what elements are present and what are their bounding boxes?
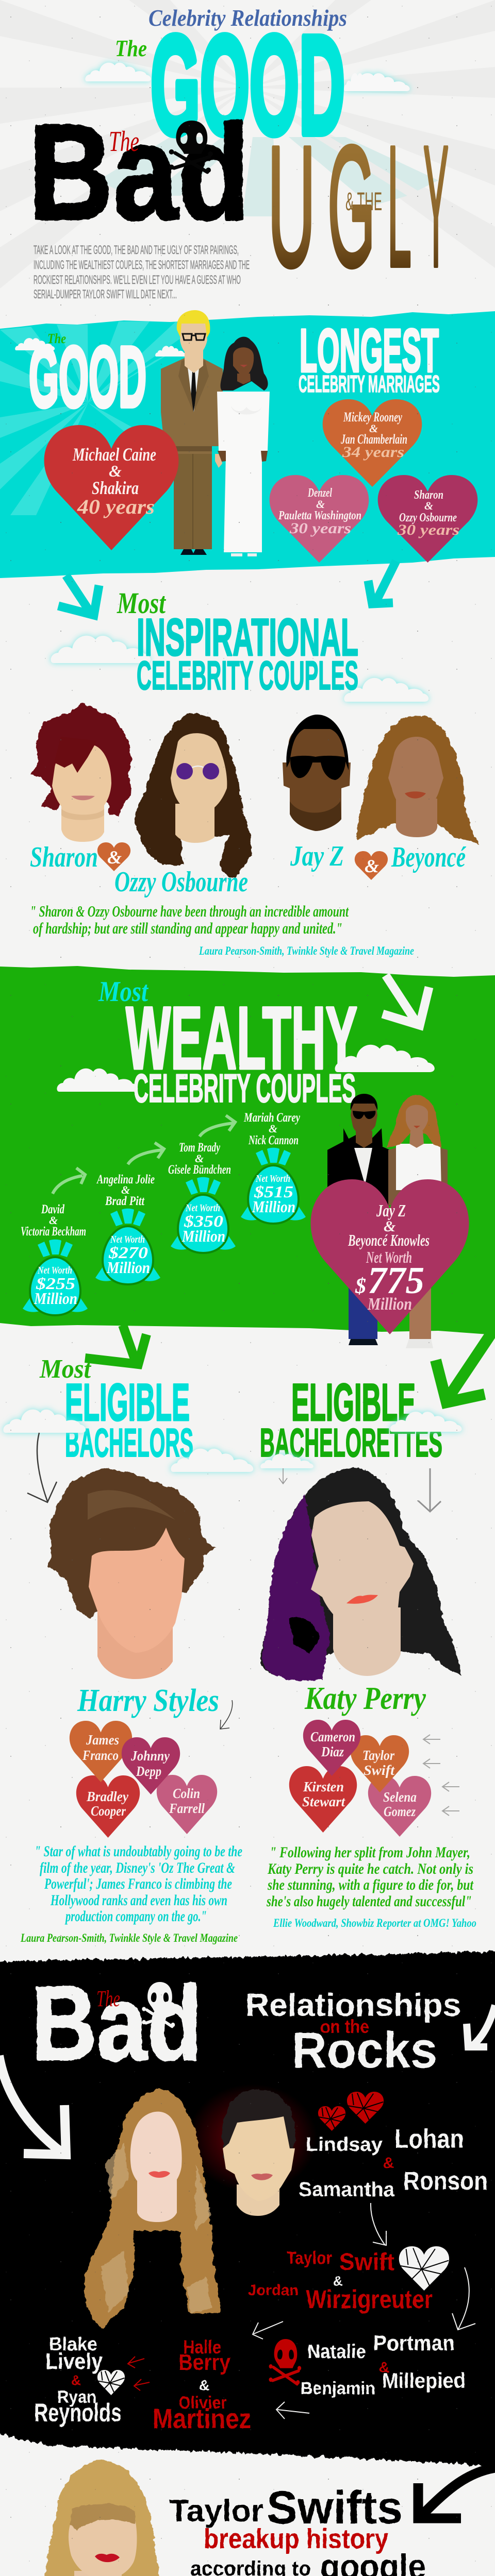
hearts: Bachelorettes: Taylor <box>362 1748 394 1763</box>
hearts: Bachelors <box>70 1721 217 1838</box>
heart: Jay Z and Beyonce net worth: Jay Z <box>376 1201 406 1221</box>
face: Sharon Osbourne <box>31 703 132 842</box>
names: Portman and Millepied <box>301 2331 466 2398</box>
heart: Michael Caine and Shakira: 40 years <box>77 495 155 518</box>
names: Swift and Wirzigreuter: & <box>333 2273 343 2289</box>
thin arrows <box>253 2267 475 2419</box>
money bag: Jolie Pitt: Brad Pitt <box>105 1194 145 1208</box>
face: Beyonce <box>357 716 480 845</box>
panel: most wealthy couples <box>0 966 495 1348</box>
names: Lively and Reynolds: Blake <box>49 2333 97 2354</box>
hearts: Bachelorettes: Swift <box>364 1762 395 1778</box>
heart ampersand: & <box>107 847 122 868</box>
black brushed band <box>0 1952 495 2469</box>
quote: " Sharon & Ozzy Osbourne have been through an incredible amount <box>30 902 349 920</box>
names: Lively and Reynolds <box>34 2333 122 2427</box>
hearts: Bachelorettes: Gomez <box>384 1804 416 1819</box>
money bag: Jolie Pitt: Angelina Jolie <box>96 1173 155 1187</box>
face: Taylor Swift <box>41 2461 188 2576</box>
money bag: Brady Bundchen: Net Worth <box>185 1202 220 1214</box>
figure: groom <box>161 310 223 555</box>
arrows between bags <box>53 1115 235 1194</box>
cloud left <box>51 636 151 663</box>
money bag: Brady Bundchen: Gisele Bündchen <box>168 1163 231 1177</box>
heart: Mickey Rooney and Jan Chamberlain: Jan Chamberlain <box>340 432 407 447</box>
name: Katy Perry: Katy Perry <box>304 1681 426 1716</box>
heart: Sharon and Ozzy Osbourne: & <box>424 499 433 512</box>
heart: Michael Caine and Shakira <box>44 425 178 550</box>
heart: Denzel and Pauletta Washington: Pauletta Washington <box>278 509 361 522</box>
cloud centre <box>155 346 186 357</box>
money bag: Beckham: Victoria Beckham <box>21 1225 86 1239</box>
quote: Katy Perry <box>266 1844 474 1910</box>
heart: Jay Z and Beyonce net worth <box>310 1179 469 1334</box>
hearts: Bachelorettes <box>289 1720 431 1837</box>
broken heart white <box>399 2246 449 2291</box>
heading: eligible bachelorettes <box>260 1373 442 1465</box>
heading: Relationships on the Rocks: Rocks <box>292 2022 437 2078</box>
names: Lively and Reynolds: Lively <box>45 2349 103 2374</box>
background sun rays <box>0 0 495 289</box>
face: Samantha Ronson <box>222 2090 295 2216</box>
heading: eligible bachelors <box>65 1373 193 1465</box>
heart: Mickey Rooney and Jan Chamberlain <box>323 399 422 487</box>
quote: James Franco: Hollywood ranks and even has his own <box>50 1892 227 1909</box>
arrow right <box>467 2005 495 2047</box>
thin arrows <box>27 1433 441 1512</box>
heading: Taylor Swifts breakup history according to google: Taylor <box>169 2494 263 2528</box>
names: Lively and Reynolds: Ryan <box>57 2387 96 2407</box>
money bag: Carey Cannon: $515 <box>254 1182 293 1201</box>
BAD heading: Bad <box>31 1964 202 2082</box>
money bag: Carey Cannon <box>241 1111 306 1224</box>
cloud left <box>15 338 55 350</box>
heart: Michael Caine and Shakira: Shakira <box>92 478 139 498</box>
face: Harry Styles <box>49 1468 217 1679</box>
heart ampersand <box>97 842 130 871</box>
intro paragraph <box>34 243 250 301</box>
section: main title: ROCKIEST RELATIONSHIPS. WE'LL EVEN LET YOU HAVE A GUESS AT WHO <box>34 273 241 287</box>
money bag: Brady Bundchen: Million <box>182 1227 225 1245</box>
heart: Denzel and Pauletta Washington <box>270 475 369 563</box>
hearts: Bachelorettes: Kirsten <box>303 1779 344 1794</box>
"The" green: The <box>115 35 147 61</box>
heart: Mickey Rooney and Jan Chamberlain: & <box>369 422 378 435</box>
names: Swift and Wirzigreuter: Taylor <box>287 2248 332 2268</box>
names: Berry and Martinez <box>153 2336 251 2434</box>
face: Ozzy Osbourne <box>135 713 252 878</box>
hearts: Bachelorettes: Stewart <box>302 1794 345 1809</box>
heart: Michael Caine and Shakira: & <box>109 462 122 480</box>
small white broken heart <box>97 2370 125 2395</box>
money bag: Carey Cannon: Million <box>252 1197 295 1216</box>
label: Sharon: Sharon <box>30 841 98 873</box>
hearts: Bachelors: Franco <box>82 1748 119 1763</box>
names: Lohan and Ronson <box>299 2124 488 2201</box>
heading: eligible bachelors: ELIGIBLE <box>65 1373 190 1432</box>
panel: the bad, relationships on the rocks <box>0 1952 495 2469</box>
money bag: Beckham: $255 <box>36 1274 75 1293</box>
money bag: Jolie Pitt: & <box>121 1183 130 1196</box>
red glow <box>188 2084 317 2192</box>
names: Lively and Reynolds: & <box>71 2372 81 2388</box>
money bag: Jolie Pitt: Net Worth <box>110 1234 145 1245</box>
"The" red: The <box>109 126 139 158</box>
hearts: Bachelors: Cooper <box>91 1803 126 1819</box>
heart ampersand: & <box>365 856 379 876</box>
heading: eligible bachelors: BACHELORS <box>65 1420 193 1465</box>
quote <box>30 902 349 937</box>
heading: Taylor Swifts breakup history according to google: breakup history <box>204 2523 388 2554</box>
names: Lohan and Ronson: Samantha <box>299 2178 395 2201</box>
UGLY wordmark: G <box>327 110 375 302</box>
money bag: Beckham: David <box>41 1202 64 1216</box>
broken heart <box>347 2092 384 2124</box>
heart: Sharon and Ozzy Osbourne <box>378 475 477 563</box>
heading: Relationships on the Rocks <box>245 1988 461 2078</box>
hearts: Bachelorettes: Diaz <box>321 1744 344 1759</box>
label: Jay Z: Jay Z <box>290 840 344 872</box>
face: Blake Lively <box>84 2089 221 2330</box>
thin arrow <box>371 2203 386 2245</box>
"The": The <box>47 331 66 346</box>
heading: Relationships on the Rocks: Relationships <box>245 1988 461 2023</box>
teal torn band <box>0 311 495 578</box>
cloud right <box>335 1045 435 1072</box>
thin arrow <box>220 1700 233 1729</box>
BAD wordmark: Bad <box>28 96 250 248</box>
names: Portman and Millepied: & <box>379 2359 389 2375</box>
names: Portman and Millepied: Benjamin <box>301 2379 375 2398</box>
quote: James Franco: " Star of what is undoubtably going to be the <box>35 1843 242 1860</box>
panel: the good, longest marriages <box>0 310 495 578</box>
money bag: Beckham: Million <box>34 1289 77 1308</box>
name: Harry Styles: Harry Styles <box>77 1683 219 1718</box>
heading: Celebrity Relationships: Celebrity Relationships <box>148 5 347 31</box>
face: Jay Z <box>283 715 351 831</box>
names: Berry and Martinez: & <box>199 2377 209 2393</box>
section: main title <box>28 5 449 302</box>
names: Swift and Wirzigreuter: Wirzigreuter <box>306 2285 433 2314</box>
sun rays behind GOOD <box>0 320 206 515</box>
panel: most eligible <box>3 1325 492 1944</box>
heart: Mickey Rooney and Jan Chamberlain: 34 years <box>342 444 404 461</box>
icon: skull <box>142 1982 176 2027</box>
UGLY wordmark: L <box>387 110 411 302</box>
"The": The <box>96 1986 120 2011</box>
"Most": Most <box>98 976 148 1008</box>
attribution: Laura Pearson-Smith, Twinkle Style & Travel Magazine <box>199 944 414 957</box>
quote: James Franco: production company on the go." <box>64 1908 207 1925</box>
heart: Sharon and Ozzy Osbourne: 30 years <box>397 521 459 538</box>
money bag: Brady Bundchen: $350 <box>184 1212 223 1230</box>
money bag: Beckham: Net Worth <box>37 1265 72 1276</box>
section: main title: TAKE A LOOK AT THE GOOD, THE BAD AND THE UGLY OF STAR PAIRINGS, <box>34 243 239 257</box>
names: Berry and Martinez: Martinez <box>153 2403 251 2434</box>
heading: Taylor Swifts breakup history according to google: Swifts <box>267 2482 403 2534</box>
heart: Jay Z and Beyonce net worth: & <box>384 1218 395 1235</box>
heart: Mickey Rooney and Jan Chamberlain: Mickey Rooney <box>343 410 402 425</box>
panel: most inspirational couples <box>30 561 480 957</box>
money bag: Carey Cannon: Nick Cannon <box>248 1133 299 1147</box>
cloud right <box>344 678 428 702</box>
cloud left <box>85 62 151 81</box>
heart: Jay Z and Beyonce net worth: Beyoncé Knowles <box>348 1231 430 1249</box>
intro paragraph: SERIAL-DUMPER TAYLOR SWIFT WILL DATE NEXT... <box>34 287 177 301</box>
face: Katy Perry <box>261 1468 461 1681</box>
hearts: Bachelors: James <box>86 1732 119 1748</box>
attribution: Laura Pearson-Smith, Twinkle Style & Travel Magazine <box>20 1931 238 1944</box>
money bag: Carey Cannon: & <box>269 1122 277 1135</box>
green torn band <box>0 966 495 1335</box>
names: Lohan and Ronson: & <box>383 2155 394 2172</box>
heart: Jay Z and Beyonce net worth: 775 <box>368 1260 424 1302</box>
cloud left <box>57 1069 138 1092</box>
heart: Sharon and Ozzy Osbourne: Ozzy Osbourne <box>399 511 457 524</box>
names: Lohan and Ronson: Lohan <box>394 2124 464 2154</box>
names: Berry and Martinez: Berry <box>178 2350 230 2375</box>
names: Lively and Reynolds: Reynolds <box>34 2398 122 2427</box>
quote: James Franco: film of the year, Disney's 'Oz The Great & <box>40 1859 235 1876</box>
small red arrow <box>128 2357 144 2368</box>
figure: bride <box>217 337 270 556</box>
hearts: Bachelors: Colin <box>173 1786 200 1801</box>
heart: Denzel and Pauletta Washington: Denzel <box>307 486 332 500</box>
money bag: Jolie Pitt: Million <box>106 1258 150 1277</box>
arrow white <box>383 975 429 1025</box>
cloud right overlap <box>344 73 374 91</box>
hearts: Bachelors: Johnny <box>130 1748 170 1764</box>
heart: Sharon and Ozzy Osbourne: Sharon <box>414 488 443 502</box>
quote: of hardship; but are still standing and appear happy and united." <box>33 919 342 937</box>
clouds <box>3 1410 461 1472</box>
money bag: Jolie Pitt: $270 <box>108 1243 148 1262</box>
names: Berry and Martinez: Olivier <box>178 2393 227 2413</box>
hearts: Bachelorettes: Selena <box>383 1789 417 1805</box>
money bag: Carey Cannon: Net Worth <box>255 1173 290 1184</box>
icon: skull and crossbones <box>169 121 213 173</box>
hearts: Bachelors: Depp <box>136 1764 161 1779</box>
panel: Taylor Swift breakup history <box>41 2461 495 2576</box>
small red arrow <box>134 2379 150 2391</box>
section: main title: & THE <box>345 187 382 216</box>
broken hearts <box>318 2106 345 2131</box>
figure: Jay Z <box>327 1094 390 1345</box>
heart: Denzel and Pauletta Washington: & <box>316 498 325 511</box>
label: Beyonce: Beyoncé <box>391 841 467 873</box>
rays under GOOD <box>98 137 438 216</box>
heart: Denzel and Pauletta Washington: 30 years <box>289 520 351 537</box>
money bag: Brady Bundchen: Tom Brady <box>179 1141 221 1155</box>
arrow green left <box>85 1325 146 1364</box>
heart: Jay Z and Beyonce net worth: Net Worth <box>366 1248 412 1266</box>
arrow green right <box>436 1332 492 1402</box>
names: Swift and Wirzigreuter: Jordan <box>248 2282 299 2299</box>
names: Portman and Millepied: Portman <box>373 2331 455 2355</box>
hearts: Bachelors: Farrell <box>169 1801 205 1816</box>
grey arrows <box>423 1735 459 1816</box>
hearts: Bachelorettes: Cameron <box>310 1729 355 1744</box>
icon: red skull <box>269 2339 301 2384</box>
money bag: Beckham <box>21 1202 88 1315</box>
heart: Jay Z and Beyonce net worth: $ <box>355 1275 366 1298</box>
arrow left <box>58 575 99 615</box>
arrow black <box>418 2468 495 2518</box>
money bag: Jolie Pitt <box>95 1173 160 1284</box>
"Most": Most <box>117 586 166 620</box>
names: Portman and Millepied: Millepied <box>382 2368 466 2393</box>
names: Portman and Millepied: Natalie <box>307 2341 366 2363</box>
names: Lohan and Ronson: Lindsay <box>306 2134 383 2156</box>
money bag: Carey Cannon: Mariah Carey <box>243 1111 301 1125</box>
quote: James Franco: Powerful'; James Franco is climbing the <box>44 1875 232 1892</box>
cloud right <box>344 73 410 91</box>
panel: the good, longest marriages: GOOD <box>29 329 146 425</box>
heart: Michael Caine and Shakira: Michael Caine <box>72 444 156 465</box>
names: Swift and Wirzigreuter: Swift <box>339 2248 394 2275</box>
heart ampersand <box>355 851 388 880</box>
money bag: Beckham: & <box>49 1214 58 1227</box>
label: Ozzy Osbourne: Ozzy Osbourne <box>114 866 248 898</box>
arrow right <box>368 561 396 604</box>
UGLY wordmark <box>268 110 449 302</box>
quote: James Franco <box>35 1843 242 1925</box>
money bag: Brady Bundchen: & <box>195 1152 204 1165</box>
heading: Taylor Swifts breakup history according to google <box>169 2482 426 2576</box>
names: Berry and Martinez: Halle <box>183 2336 221 2358</box>
UGLY wordmark: U <box>268 110 316 302</box>
money bag: Brady Bundchen <box>168 1141 236 1253</box>
hearts: Bachelors: Bradley <box>86 1789 129 1804</box>
names: Swift and Wirzigreuter <box>248 2248 433 2314</box>
heading: Relationships on the Rocks: on the <box>320 2016 369 2037</box>
figure: Beyonce <box>387 1095 448 1348</box>
"Most": Most <box>39 1354 91 1384</box>
arrow big left <box>0 2056 66 2155</box>
heart: Jay Z and Beyonce net worth: Million <box>367 1295 412 1314</box>
